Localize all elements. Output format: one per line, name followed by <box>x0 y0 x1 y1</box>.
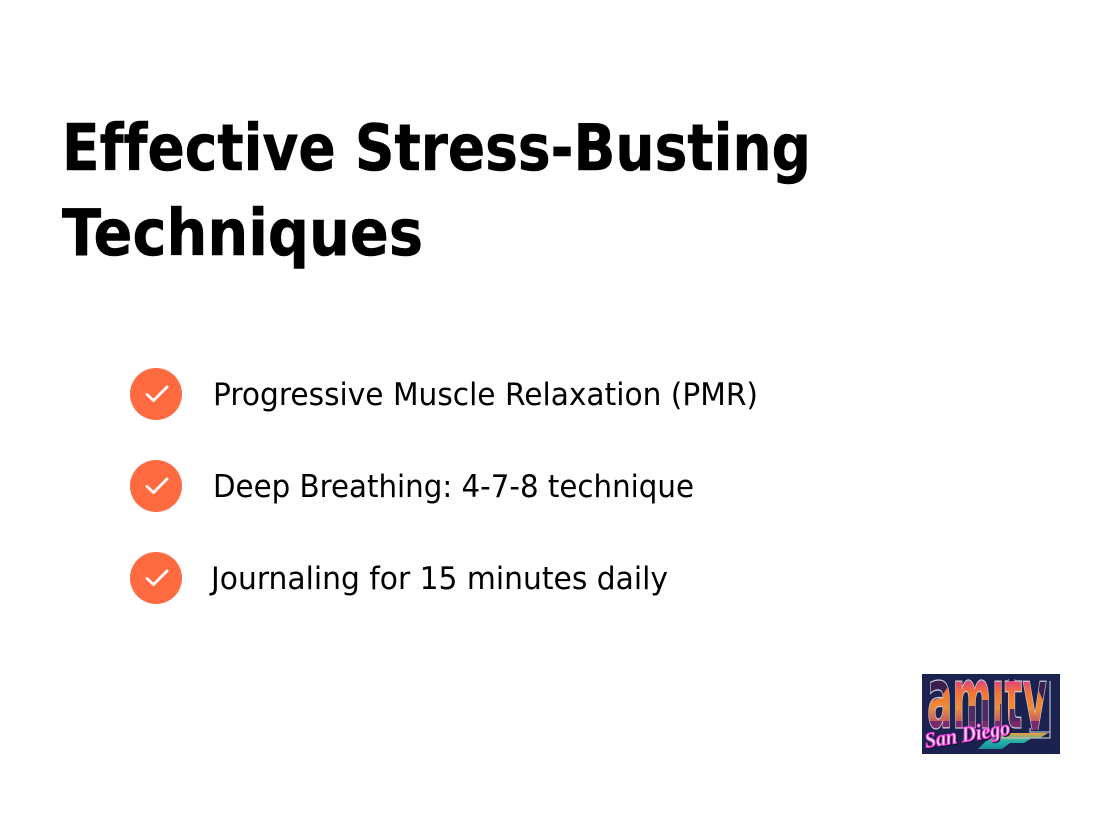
icon: check badge 1 <box>130 368 182 420</box>
checklist <box>130 368 758 604</box>
item: journaling <box>130 552 668 604</box>
logo script: San Diego <box>923 715 1012 753</box>
logo: Amity San Diego <box>922 674 1060 754</box>
item: progressive muscle relaxation <box>130 368 758 420</box>
title <box>62 112 811 271</box>
title: Effective Stress-Busting <box>62 112 811 186</box>
sea stripes <box>978 733 1048 749</box>
text: item 3: Journaling for 15 minutes daily <box>209 561 668 597</box>
icon: check badge 2 <box>130 460 182 512</box>
text: item 2: Deep Breathing: 4-7-8 technique <box>213 469 694 505</box>
item: deep breathing <box>130 460 694 512</box>
icon: check badge 3 <box>130 552 182 604</box>
text: item 1: Progressive Muscle Relaxation (PMR) <box>213 377 758 413</box>
outline frame <box>1000 681 1050 738</box>
title: Techniques <box>62 197 423 271</box>
